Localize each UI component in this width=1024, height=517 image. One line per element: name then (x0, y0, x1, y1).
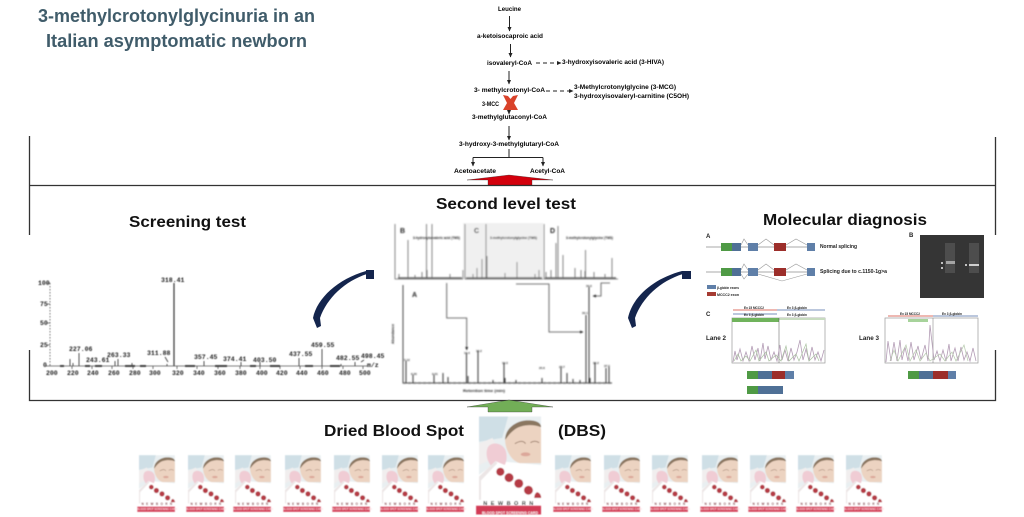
spectrum labels: 380 (235, 370, 247, 377)
panel: second level chromatogram and spectra (390, 223, 618, 393)
pathway labels: 3-hydroxy-3-methylglutaryl-CoA (459, 141, 559, 148)
spectrum labels: 374.41 (223, 356, 247, 363)
pathway labels: 3-hydroxyisovaleryl-carnitine (C5OH) (574, 93, 689, 100)
panel B C D spectra: C (474, 228, 479, 235)
card: large central (476, 417, 541, 515)
panel: molecular diagnosis figure (706, 233, 984, 394)
pathway labels: Acetoacetate (454, 168, 496, 175)
spectrum labels: 500 (359, 370, 371, 377)
spectrum labels: 25 (40, 342, 48, 349)
heading: molecular diagnosis: Molecular diagnosis (763, 212, 927, 229)
card 9 (602, 455, 642, 512)
lane 2 sequence trace: Ex 3 β-globin (787, 305, 807, 310)
card 13: NEWBORN (801, 502, 833, 506)
spectrum labels: 440 (296, 370, 308, 377)
label: DBS: (DBS) (558, 423, 606, 440)
spectrum labels: 240 (87, 370, 99, 377)
panel A chromatogram: 9.01 (432, 372, 438, 376)
lane 2 sequence trace (732, 305, 825, 363)
spectrum labels: 403.50 (253, 357, 277, 364)
spectrum labels: 357.45 (194, 354, 218, 361)
card 3 (233, 455, 273, 512)
lane 3 transcript bar (908, 371, 956, 379)
spectrum labels: 300 (149, 370, 161, 377)
card 5: NEWBORN (337, 502, 369, 506)
lane 2 sequence trace: Ex 15 MCCC2 (744, 305, 765, 310)
panel A chromatogram: 5.12 (404, 358, 410, 362)
heading: second level test: Second level test (436, 196, 577, 213)
card 2 (186, 455, 226, 512)
card 1: NEWBORN (142, 502, 174, 506)
panel A chromatogram: 33.1 (582, 311, 588, 315)
spectrum labels: 311.88 (147, 350, 171, 357)
spectrum labels: 318.41 (161, 277, 185, 284)
aberrant splicing diagram: Splicing due to c.1150-1g>a (820, 269, 888, 275)
normal splicing diagram (706, 239, 857, 251)
spectrum labels: 360 (214, 370, 226, 377)
panel A chromatogram: 34.0 (586, 284, 592, 288)
label: dried blood spot: Dried Blood Spot (324, 423, 465, 440)
card 4: NEWBORN (288, 502, 320, 506)
spectrum labels: 480 (339, 370, 351, 377)
card 11 (700, 455, 740, 512)
panel A chromatogram (390, 283, 612, 393)
spectrum labels (38, 277, 385, 377)
spectrum labels: 0 (43, 362, 47, 369)
pathway labels: a-ketoisocaproic acid (477, 33, 543, 40)
card 9: NEWBORN (607, 502, 639, 506)
panel A chromatogram: 35.2 (593, 361, 599, 365)
pathway labels: Leucine (498, 6, 521, 13)
panel A chromatogram: Abundance (390, 323, 395, 344)
card 14: NEWBORN (849, 502, 881, 506)
spectrum labels: 263.33 (107, 352, 131, 359)
card 4 (283, 455, 323, 512)
title (38, 6, 315, 51)
panel A chromatogram: Retention time (min) (463, 388, 506, 393)
exon legend: MCCC2 exon (717, 292, 739, 297)
spectrum labels: 498.45 (361, 353, 385, 360)
panel B C D spectra: 3-methylcrotonylglycine (TMS) (566, 235, 614, 240)
gel image (909, 233, 984, 298)
card 10: BLOOD SPOT SCREENING CARD (650, 508, 690, 511)
card: large central: NEWBORN (483, 501, 537, 507)
card 5 (332, 455, 372, 512)
spectrum labels: 75 (40, 301, 48, 308)
pathway labels: 3-methylglutaconyl-CoA (472, 114, 547, 121)
panel A chromatogram: 6.20 (411, 372, 417, 376)
panel B C D spectra: 3-methylcrotonylglycine (TMS) (490, 235, 538, 240)
arrow: curved second level to molecular (628, 271, 691, 328)
card 8: NEWBORN (558, 502, 590, 506)
card 7: BLOOD SPOT SCREENING CARD (426, 508, 466, 511)
card 9: BLOOD SPOT SCREENING CARD (602, 508, 642, 511)
pathway labels: 3-MCC (482, 101, 499, 108)
panel B C D spectra: B (400, 228, 405, 235)
spectrum labels: 340 (193, 370, 205, 377)
panel A chromatogram: 25.6 (539, 366, 545, 370)
exon legend: β-globin exons (717, 285, 740, 290)
card 7: NEWBORN (431, 502, 463, 506)
spectrum labels: 437.55 (289, 351, 313, 358)
title: 3-methylcrotonylglycinuria in an (38, 6, 315, 26)
spectrum labels: 482.55 (336, 355, 360, 362)
pathway arrows (473, 16, 573, 166)
panel A chromatogram: A (412, 292, 417, 299)
spectrum peaks (60, 283, 364, 366)
card 11: BLOOD SPOT SCREENING CARD (700, 508, 740, 511)
spectrum labels: 220 (67, 370, 79, 377)
panel A chromatogram: 28.7 (559, 365, 565, 369)
card 13: BLOOD SPOT SCREENING CARD (796, 508, 836, 511)
lane 2 sequence trace: Ex 3 β-globin (787, 312, 807, 317)
card 6: NEWBORN (385, 502, 417, 506)
spectrum labels: 320 (172, 370, 184, 377)
pathway labels: 3-Methylcrotonylglycine (3-MCG) (574, 84, 676, 91)
spectrum labels: 100 (38, 280, 50, 287)
arrow: red up arrow (467, 175, 553, 185)
spectrum labels: 460 (317, 370, 329, 377)
spectrum labels: 227.06 (69, 346, 93, 353)
pathway labels: Acetyl-CoA (530, 168, 565, 175)
card 1 (137, 455, 177, 512)
heading: screening test: Screening test (129, 214, 247, 231)
spectrum labels: 260 (108, 370, 120, 377)
newborn screening cards (137, 417, 884, 515)
card 6: BLOOD SPOT SCREENING CARD (380, 508, 420, 511)
pathway labels (454, 6, 689, 175)
spectrum axes (46, 283, 368, 369)
panel B C D spectra: D (550, 228, 555, 235)
spectrum labels: m/z (367, 362, 379, 369)
normal splicing diagram: Normal splicing (820, 244, 857, 250)
panel frame (30, 136, 996, 400)
spectrum labels: 400 (256, 370, 268, 377)
icon: red cross enzyme block (503, 95, 518, 110)
lane 2 label: Lane 2 (706, 335, 726, 342)
panel A chromatogram: 15.2 (476, 349, 482, 353)
lane 3 sequence trace: Ex 15 MCCC2 (900, 311, 921, 316)
gel image: B (909, 233, 914, 239)
card 8: BLOOD SPOT SCREENING CARD (553, 508, 593, 511)
card 14 (844, 455, 884, 512)
panel B C D spectra (395, 223, 618, 279)
card 3: NEWBORN (238, 502, 270, 506)
card 12 (748, 455, 788, 512)
panel label A: A (706, 234, 711, 240)
card: large central: BLOOD SPOT SCREENING CARD (482, 511, 538, 515)
card 12: BLOOD SPOT SCREENING CARD (748, 508, 788, 511)
lane 2 transcript bars (747, 371, 794, 394)
arrow: curved screening to second level (313, 270, 374, 328)
card 2: BLOOD SPOT SCREENING CARD (186, 508, 226, 511)
card 2: NEWBORN (191, 502, 223, 506)
spectrum labels: 459.55 (311, 342, 335, 349)
card 10: NEWBORN (655, 502, 687, 506)
metabolic pathway diagram (454, 6, 689, 175)
card 6 (380, 455, 420, 512)
pathway labels: 3-hydroxyisovaleric acid (3-HIVA) (562, 59, 664, 66)
arrow: green up arrow (467, 400, 553, 412)
panel label C: C (706, 312, 711, 318)
pathway labels: 3- methylcrotonyl-CoA (474, 87, 545, 94)
spectrum labels: 420 (276, 370, 288, 377)
panel A chromatogram: 37.0 (604, 364, 610, 368)
card 13 (796, 455, 836, 512)
spectrum labels: 50 (40, 320, 48, 327)
panel B C D spectra: 3-hydroxyisovaleric acid (TMS) (413, 235, 461, 240)
lane 3 sequence trace (885, 311, 978, 363)
spectrum labels: 200 (46, 370, 58, 377)
lane 3 sequence trace: Ex 3 β-globin (942, 311, 962, 316)
card 11: NEWBORN (705, 502, 737, 506)
panel A chromatogram: 13.4 (464, 351, 470, 355)
lane 3 label: Lane 3 (859, 335, 879, 342)
chart: screening mass spectrum (38, 277, 385, 377)
exon legend (707, 285, 740, 297)
panel A chromatogram: 19.3 (502, 361, 508, 365)
card 14: BLOOD SPOT SCREENING CARD (844, 508, 884, 511)
lane 2 sequence trace: Ex 3 β-globin (744, 312, 764, 317)
pathway labels: isovaleryl-CoA (487, 60, 532, 67)
card 4: BLOOD SPOT SCREENING CARD (283, 508, 323, 511)
spectrum labels: 243.61 (86, 357, 110, 364)
card 10 (650, 455, 690, 512)
card 5: BLOOD SPOT SCREENING CARD (332, 508, 372, 511)
card 12: NEWBORN (753, 502, 785, 506)
card 1: BLOOD SPOT SCREENING CARD (137, 508, 177, 511)
card 7 (426, 455, 466, 512)
title: Italian asymptomatic newborn (46, 31, 307, 51)
card 8 (553, 455, 593, 512)
aberrant splicing diagram (706, 264, 888, 281)
card 3: BLOOD SPOT SCREENING CARD (233, 508, 273, 511)
spectrum labels: 280 (129, 370, 141, 377)
